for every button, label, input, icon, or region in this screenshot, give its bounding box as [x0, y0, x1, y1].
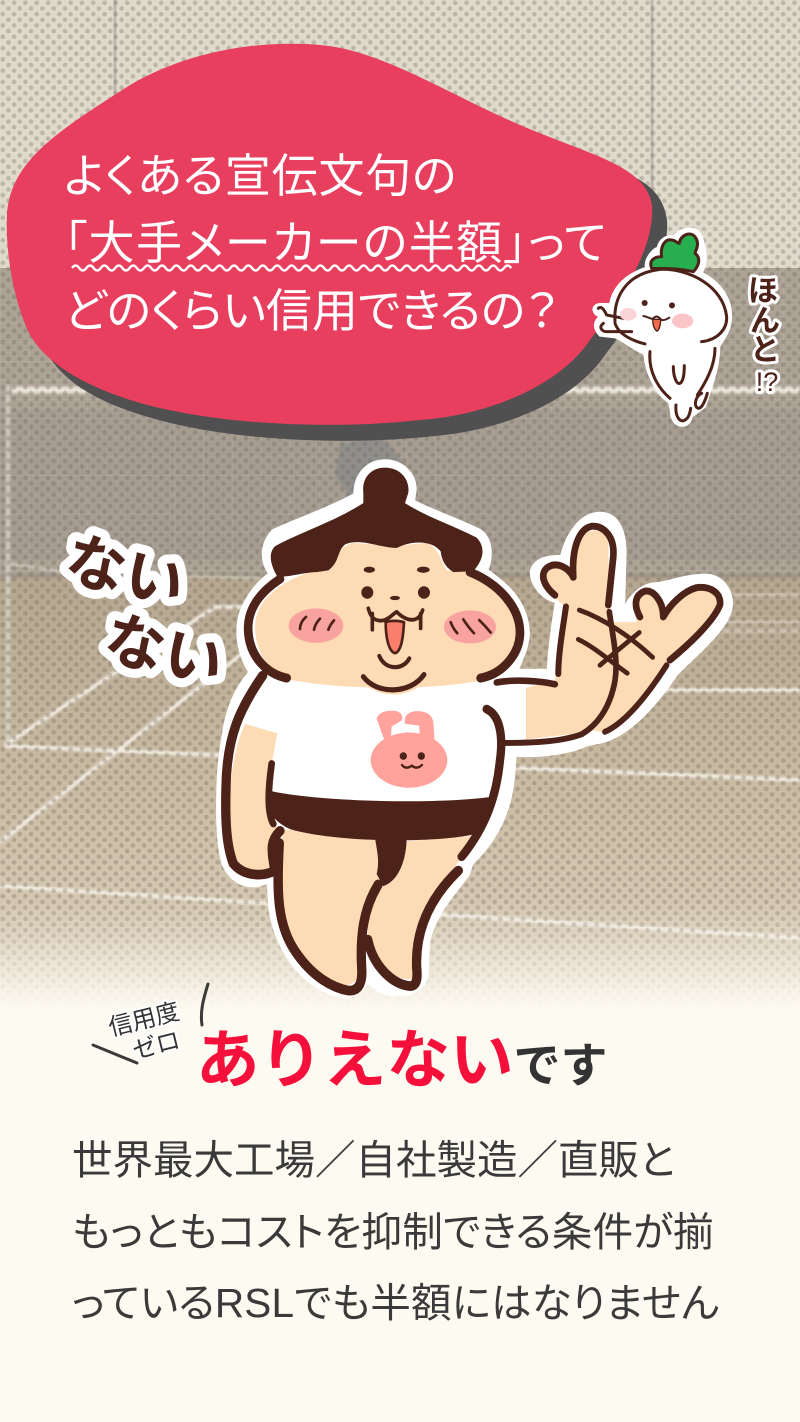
shirt rabbit logo: [371, 711, 447, 788]
text: ほんと!? vertical: ん: [750, 305, 780, 338]
text: ほんと!? vertical: ほ: [748, 275, 778, 308]
ない line 2: ない: [98, 605, 230, 699]
radish sticker outline: [593, 229, 731, 426]
cheeks: [289, 608, 343, 643]
body outlines: [226, 676, 458, 991]
mouth: [368, 608, 423, 630]
legs skin: [280, 829, 472, 985]
small label line 2: ゼロ: [130, 1027, 183, 1065]
bubble line 2: 「大手メーカーの半額」って: [64, 217, 608, 269]
text: ほんと!? vertical: !?: [756, 367, 778, 397]
tongue: [386, 621, 404, 653]
hand outlines: [497, 681, 555, 684]
head outline: [248, 572, 520, 678]
heading: ありえないです: [196, 1026, 608, 1096]
radish body lines: [598, 269, 727, 421]
speech bubble: [6, 44, 668, 441]
sumo white sticker outline: [218, 461, 731, 996]
wavy underline: [72, 266, 511, 270]
text: ほんと!? vertical: と: [750, 334, 780, 367]
belt: [267, 791, 495, 886]
left arm skin: [229, 724, 280, 872]
bubble shadow: [20, 59, 667, 441]
hair: [271, 468, 483, 577]
text: ほんと!? vertical: [748, 275, 780, 397]
body text line 1: 世界最大工場／自社製造／直販と: [72, 1137, 675, 1183]
bubble body: [7, 44, 652, 425]
ない line 1: ない: [59, 526, 191, 620]
emphasis strokes: [93, 984, 208, 1063]
radish leaf: [651, 234, 699, 272]
bubble line 1: よくある宣伝文句の: [64, 150, 457, 202]
body text line 2: もっともコストを抑制できる条件が揃: [72, 1209, 714, 1255]
small label line 1: 信用度: [106, 998, 182, 1042]
callout: 信用度ゼロ: [92, 982, 210, 1065]
radish cheeks: [620, 308, 637, 321]
radish face: [642, 300, 648, 306]
head: [248, 468, 520, 695]
body text line 3: っているRSLでも半額にはなりません: [72, 1280, 719, 1326]
bubble line 3: どのくらい信用できるの？: [64, 285, 558, 337]
right arm and hand skin: [526, 531, 719, 739]
text: ないない: [59, 526, 230, 699]
eyes and brows: [361, 567, 430, 600]
radish character: [592, 228, 782, 427]
